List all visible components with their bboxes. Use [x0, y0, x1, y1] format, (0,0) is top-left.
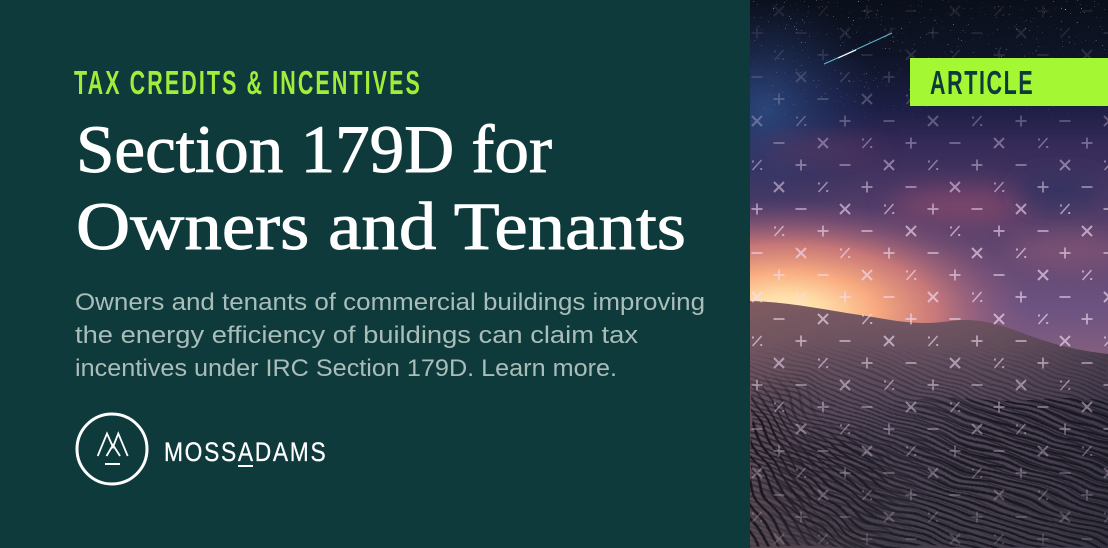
- eyebrow: tax credits and incentives: TAX CREDITS & INCENTIVES: [74, 64, 420, 101]
- description text block: incentives under IRC Section 179D. Learn more.: [75, 355, 617, 382]
- panel: dark green text panel: [0, 0, 750, 548]
- sky: [750, 0, 1108, 360]
- icon: logo circle with mountains: [77, 414, 147, 484]
- description text block: Owners and tenants of commercial buildings improving: [75, 289, 705, 316]
- panel: night sky and desert photo: [750, 0, 1108, 548]
- logo: Moss Adams: [77, 414, 326, 484]
- sand ripples: [750, 352, 1108, 548]
- stars: [750, 0, 1108, 130]
- article tag: [910, 58, 1108, 106]
- wordmark: MOSSADAMS: [164, 438, 326, 467]
- sand dune: [750, 301, 1108, 548]
- description text block: the energy efficiency of buildings can claim tax: [75, 322, 638, 349]
- article tag: ARTICLE: [930, 64, 1033, 101]
- title: [76, 111, 686, 264]
- title: Section 179D for: [76, 111, 552, 187]
- description text block: [75, 289, 705, 382]
- math symbols pattern overlay: [750, 0, 1108, 548]
- title: Owners and Tenants: [76, 188, 686, 264]
- shooting star: [824, 33, 892, 64]
